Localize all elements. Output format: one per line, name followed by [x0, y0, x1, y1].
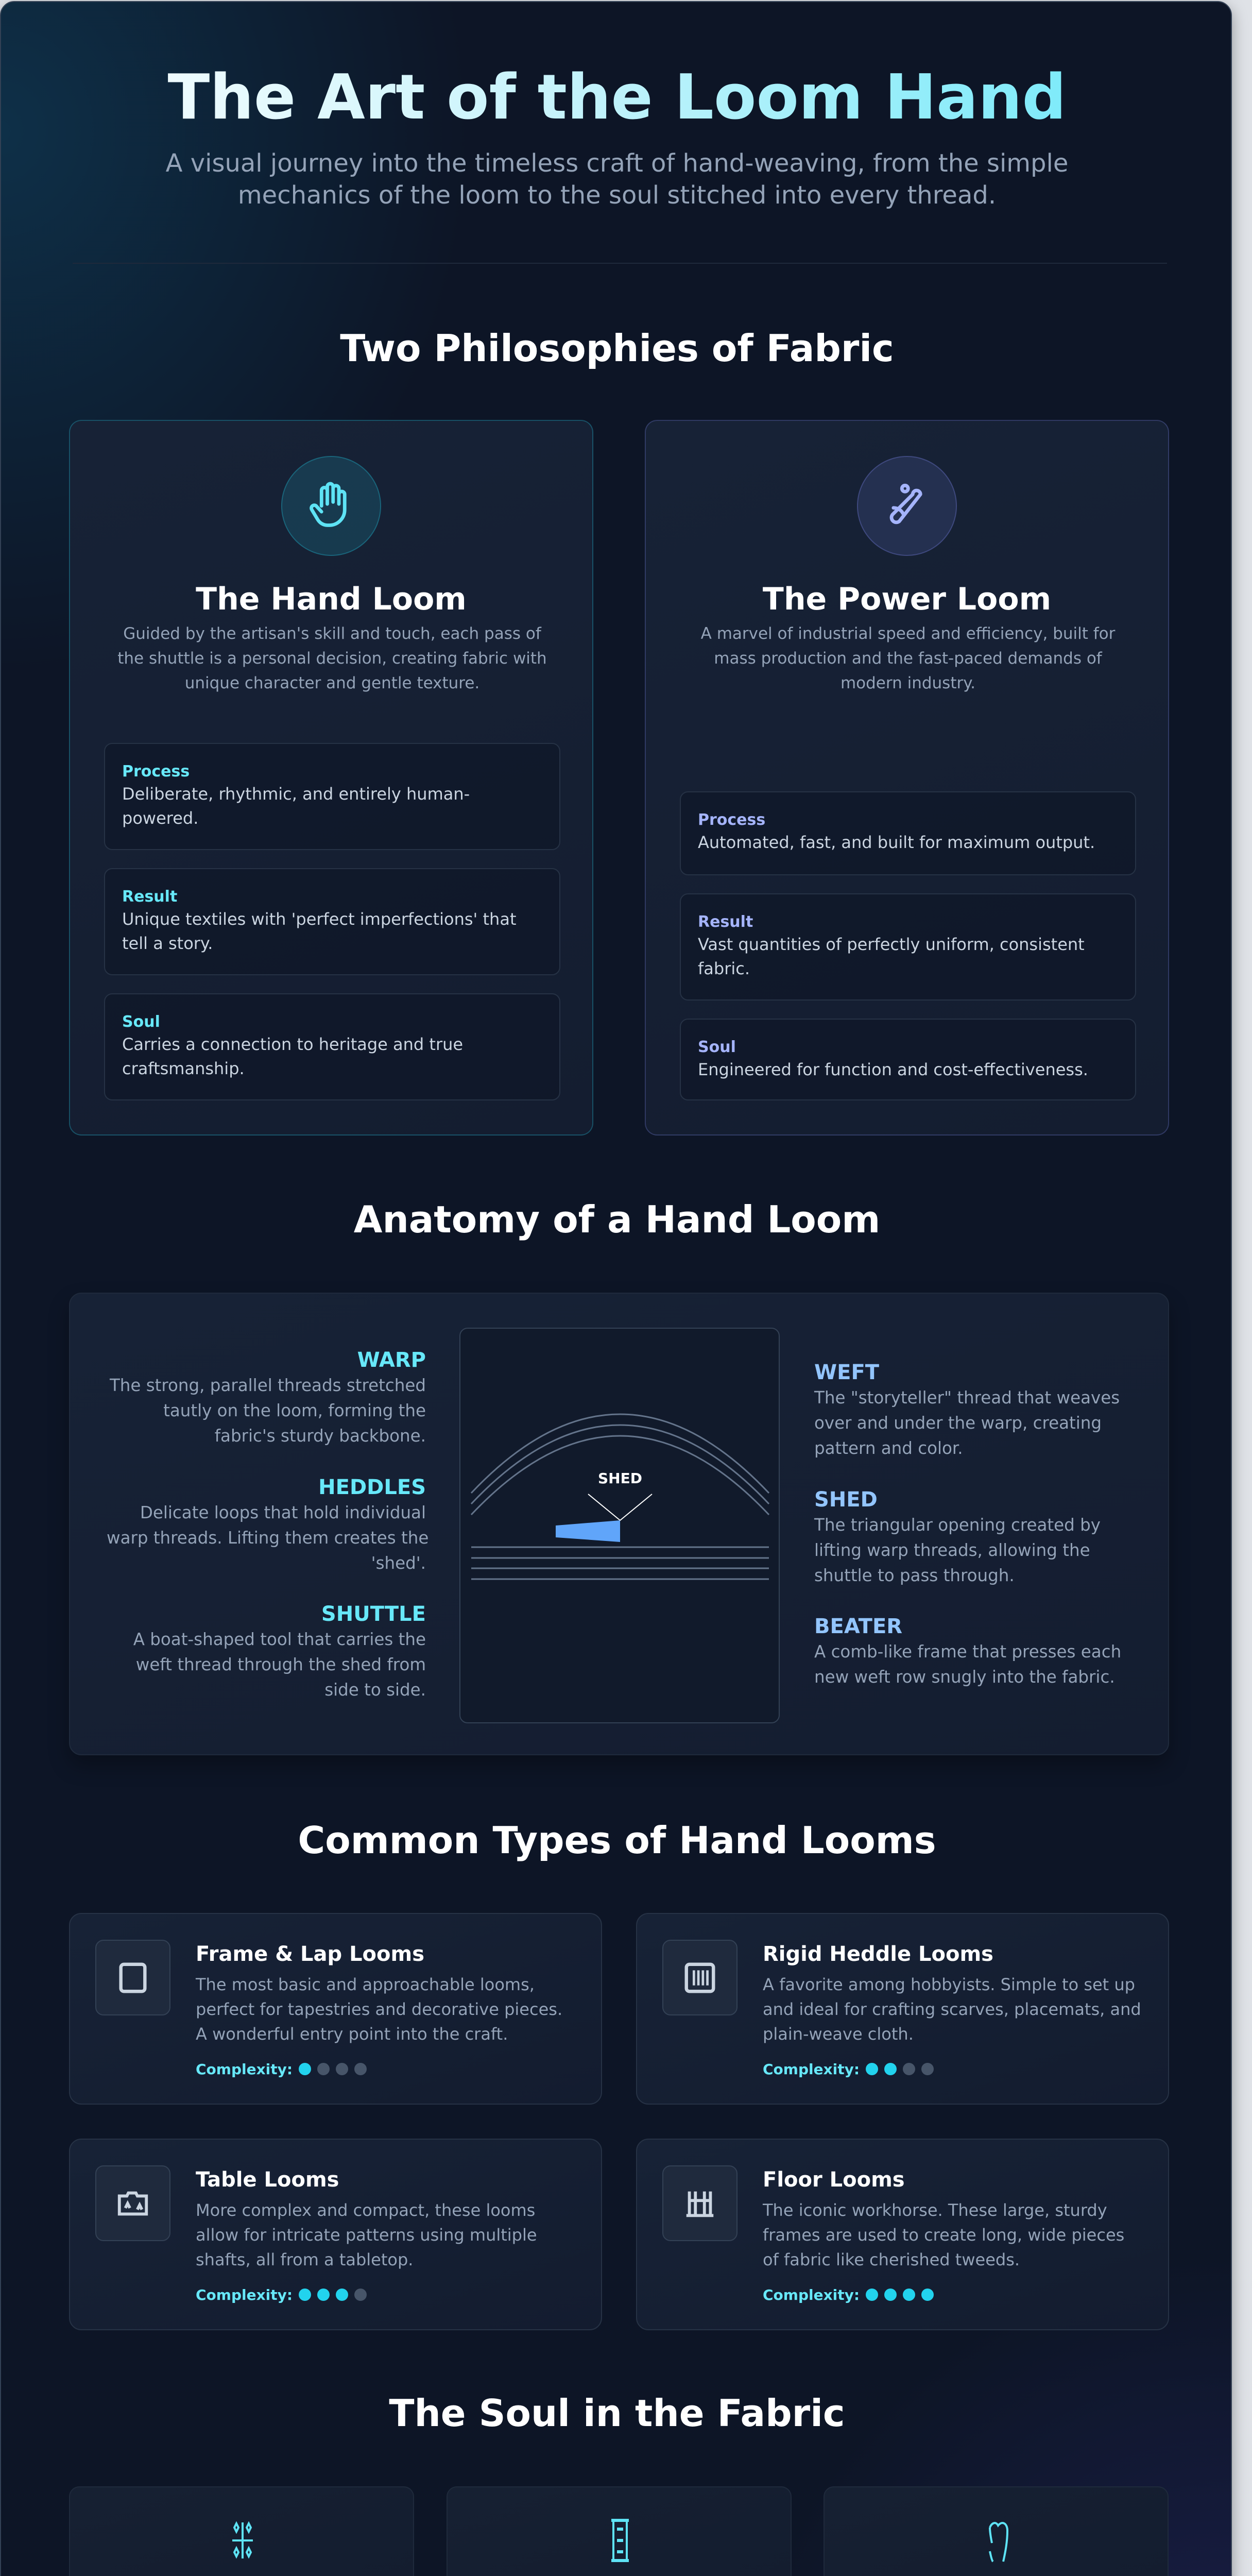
box: result: Unique textiles with 'perfect imperfections' that [122, 909, 516, 929]
box: soul [104, 993, 560, 1100]
box: process: Deliberate, rhythmic, and entirely human- [122, 784, 470, 804]
panel: hand loom [69, 420, 593, 1136]
card: table looms: Table Looms [196, 2168, 339, 2192]
label: beater [814, 1615, 1121, 1687]
box: soul: Soul [698, 1038, 736, 1056]
card: a personal touch [824, 2486, 1169, 2576]
icon: hand [281, 456, 381, 556]
card: floor looms: Floor Looms [763, 2168, 905, 2192]
card: connection to heritage [447, 2486, 792, 2576]
card: rigid heddle looms: and ideal for crafting scarves, placemats, and [763, 1999, 1141, 2019]
icon: woven story [232, 2521, 253, 2558]
complexity rating [196, 2286, 367, 2303]
box: result: fabric. [698, 959, 750, 978]
label: shuttle: SHUTTLE [321, 1602, 426, 1626]
label: weft: pattern and color. [814, 1438, 963, 1458]
card: rigid heddle looms: Rigid Heddle Looms [763, 1942, 993, 1966]
box: process: Automated, fast, and built for maximum output. [698, 833, 1095, 852]
panel: anatomy [69, 1293, 1169, 1755]
icon: floor loom [662, 2165, 738, 2241]
box: process [104, 743, 560, 850]
card: a woven story [69, 2486, 414, 2576]
label: shed: lifting warp threads, allowing the [814, 1540, 1090, 1560]
subtitle: A visual journey into the timeless craft of hand-weaving, from the simple mechanics of the loom to the soul stitched into every thread. [166, 149, 1068, 210]
box: process: powered. [122, 808, 198, 828]
label: heddles: warp threads. Lifting them creates the [107, 1528, 428, 1548]
label: beater: BEATER [814, 1615, 902, 1638]
label: shed: SHED [814, 1488, 878, 1512]
complexity rating [763, 2286, 934, 2303]
heading: types: Common Types of Hand Looms [298, 1819, 936, 1862]
card: frame & lap looms: perfect for tapestries and decorative pieces. [196, 1999, 562, 2019]
card: frame & lap looms [69, 1913, 602, 2105]
panel: power loom [645, 420, 1169, 1136]
card: rigid heddle looms: plain-weave cloth. [763, 2024, 914, 2044]
box: result [104, 868, 560, 975]
box: soul: craftsmanship. [122, 1059, 245, 1078]
heading: the hand loom: The Hand Loom [196, 581, 467, 617]
icon: rigid heddle [662, 1940, 738, 2015]
card: table looms: More complex and compact, these looms [196, 2200, 535, 2220]
heading: soul: The Soul in the Fabric [389, 2392, 845, 2435]
card: frame & lap looms: Frame & Lap Looms [196, 1942, 424, 1966]
icon: frame [95, 1940, 170, 2015]
label: shuttle: side to side. [324, 1680, 426, 1700]
label: beater: new weft row snugly into the fabric. [814, 1667, 1115, 1687]
heading: anatomy: Anatomy of a Hand Loom [354, 1198, 880, 1241]
box: result: Vast quantities of perfectly uniform, consistent [698, 935, 1085, 954]
complexity rating: Complexity: [763, 2061, 860, 2077]
label: beater: A comb-like frame that presses each [814, 1642, 1121, 1662]
box: result: Result [698, 913, 753, 931]
box: soul [680, 1019, 1136, 1100]
label: weft: The "storyteller" thread that weaves [814, 1388, 1120, 1408]
label: warp: WARP [357, 1348, 426, 1372]
box: process [680, 791, 1136, 875]
card: floor looms: The iconic workhorse. These large, sturdy [763, 2200, 1107, 2220]
box: process: Process [122, 762, 190, 781]
label: shuttle: A boat-shaped tool that carries the [133, 1630, 426, 1649]
box: soul: Soul [122, 1013, 160, 1031]
box: soul: Carries a connection to heritage and true [122, 1035, 463, 1054]
card: floor looms [636, 2139, 1169, 2330]
text: power loom description: A marvel of industrial speed and efficiency, built for mass production and the fast-paced demands of modern industry. [701, 624, 1115, 692]
label: weft: over and under the warp, creating [814, 1413, 1102, 1433]
card: frame & lap looms: The most basic and approachable looms, [196, 1975, 535, 1994]
complexity rating [763, 2061, 934, 2077]
icon: heritage [611, 2519, 629, 2562]
label: warp: tautly on the loom, forming the [163, 1401, 426, 1420]
card: rigid heddle looms: A favorite among hobbyists. Simple to set up [763, 1975, 1135, 1994]
icon: table loom [95, 2165, 170, 2241]
card: rigid heddle looms [636, 1913, 1169, 2105]
card: frame & lap looms: A wonderful entry point into the craft. [196, 2024, 508, 2044]
icon: personal touch [989, 2522, 1008, 2563]
card: floor looms: frames are used to create long, wide pieces [763, 2225, 1124, 2245]
box: soul: Engineered for function and cost-effectiveness. [698, 1060, 1088, 1079]
label: warp [109, 1348, 426, 1446]
label: heddles: 'shed'. [371, 1553, 426, 1573]
complexity rating: Complexity: [196, 2286, 293, 2303]
label: shed: shuttle to pass through. [814, 1566, 1015, 1585]
label: heddles: HEDDLES [318, 1476, 426, 1499]
label: heddles: Delicate loops that hold individual [140, 1503, 426, 1522]
card: floor looms: of fabric like cherished tweeds. [763, 2250, 1020, 2269]
box: result [680, 893, 1136, 1001]
title: The Art of the Loom Hand [168, 62, 1066, 133]
heading: two philosophies: Two Philosophies of Fabric [340, 327, 894, 370]
heading: the power loom: The Power Loom [763, 581, 1051, 617]
box: process: Process [698, 811, 765, 829]
box: result: tell a story. [122, 934, 213, 953]
box: result: Result [122, 888, 177, 906]
label: heddles [107, 1476, 428, 1573]
icon: power loom [857, 456, 957, 556]
label: weft [814, 1361, 1120, 1458]
card: table looms: shafts, all from a tabletop. [196, 2250, 413, 2269]
label: weft: WEFT [814, 1361, 879, 1384]
diagram: loom [459, 1328, 780, 1723]
complexity rating: Complexity: [196, 2061, 293, 2077]
label: shed [814, 1488, 1101, 1585]
label: warp: The strong, parallel threads stretched [110, 1376, 426, 1395]
card: table looms: allow for intricate patterns using multiple [196, 2225, 537, 2245]
label: shuttle [133, 1602, 426, 1700]
label: shed: The triangular opening created by [814, 1515, 1101, 1535]
text: hand loom description: Guided by the artisan's skill and touch, each pass of the shuttle is a personal decision, creating fabric with unique character and gentle texture. [117, 624, 547, 692]
diagram: loom: SHED [598, 1470, 642, 1487]
label: shuttle: weft thread through the shed from [136, 1655, 426, 1674]
card: table looms [69, 2139, 602, 2330]
complexity rating: Complexity: [763, 2286, 860, 2303]
label: warp: fabric's sturdy backbone. [215, 1426, 426, 1446]
complexity rating [196, 2061, 367, 2077]
